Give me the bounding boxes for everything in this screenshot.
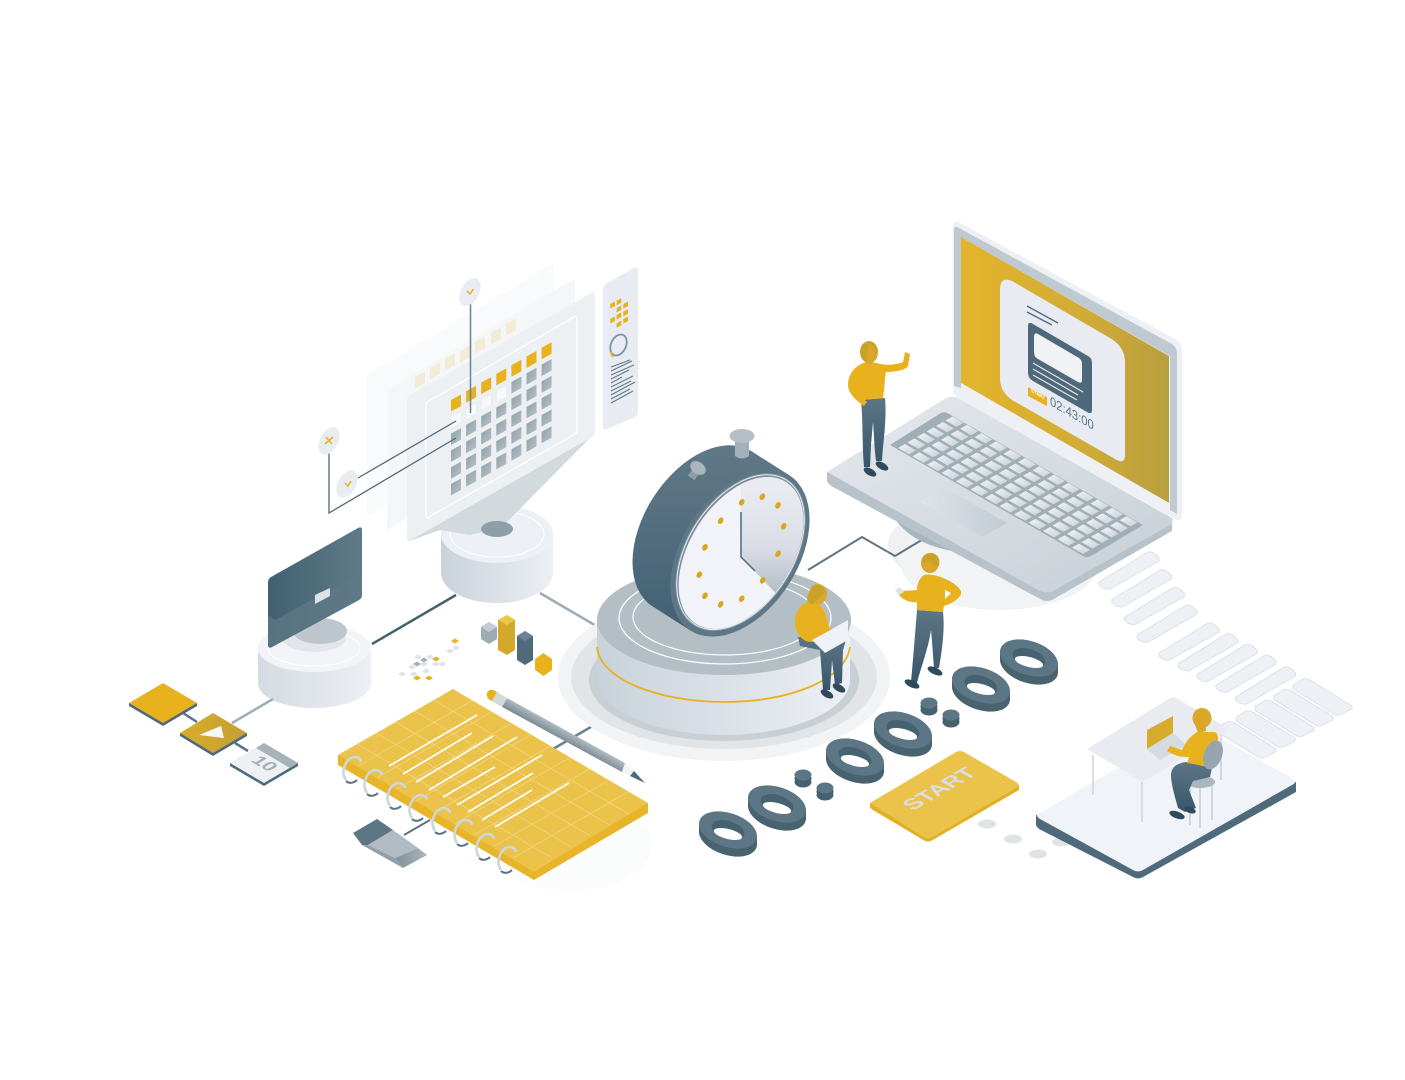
projector beam [407, 438, 590, 542]
monitor stand [258, 618, 371, 708]
stopwatch body [604, 420, 838, 662]
stopwatch [632, 429, 810, 637]
laptop: 02:43:00 [1050, 393, 1094, 433]
connector: monitor to stand [372, 595, 456, 644]
monitor [268, 527, 362, 648]
person: sitting with laptop [795, 584, 848, 701]
pencil [487, 690, 645, 783]
laptop lid [953, 222, 1182, 520]
notebook [338, 689, 648, 880]
path dots [978, 820, 1070, 858]
flow: line to monitor [232, 699, 273, 723]
callout: cross [314, 424, 456, 513]
ground shadow under laptop [888, 499, 1100, 610]
start button [870, 751, 1019, 842]
tiles path [1099, 552, 1352, 758]
person: at desk [1167, 708, 1227, 828]
clock base [558, 565, 890, 761]
laptop [827, 222, 1182, 601]
laptop: START [1031, 388, 1045, 402]
chair [1185, 760, 1221, 828]
person: standing by clock [895, 553, 961, 691]
connector: stand to clock [540, 593, 598, 627]
projector stand [441, 505, 553, 603]
stopwatch side button [684, 458, 708, 483]
stopwatch top button [730, 429, 754, 458]
flow: calendar tile [230, 743, 298, 786]
projector lens [481, 521, 513, 537]
desk [1087, 698, 1228, 822]
start button: START [896, 764, 982, 813]
ghost calendar layers [367, 265, 575, 530]
bar chart [481, 615, 552, 676]
eraser [353, 819, 430, 868]
ground shadow under notebook [488, 799, 652, 891]
desk platform [1036, 726, 1296, 878]
connector: base to pencil [553, 710, 620, 749]
timer digits 00:00:00 [694, 633, 1063, 863]
side panel [603, 267, 638, 430]
laptop stand [893, 505, 985, 553]
flow: connectors [183, 713, 248, 751]
callout: left check [332, 421, 456, 501]
calendar panel [407, 292, 595, 541]
flow: yellow square [129, 683, 197, 726]
stopwatch face [678, 477, 804, 629]
scattered data dots [398, 638, 460, 680]
callout: top check [455, 275, 485, 413]
flow: calendar tile: 10 [247, 753, 283, 774]
person: standing on laptop [848, 341, 910, 479]
connector: clock to laptop [808, 535, 930, 570]
flow: play button [180, 713, 247, 756]
